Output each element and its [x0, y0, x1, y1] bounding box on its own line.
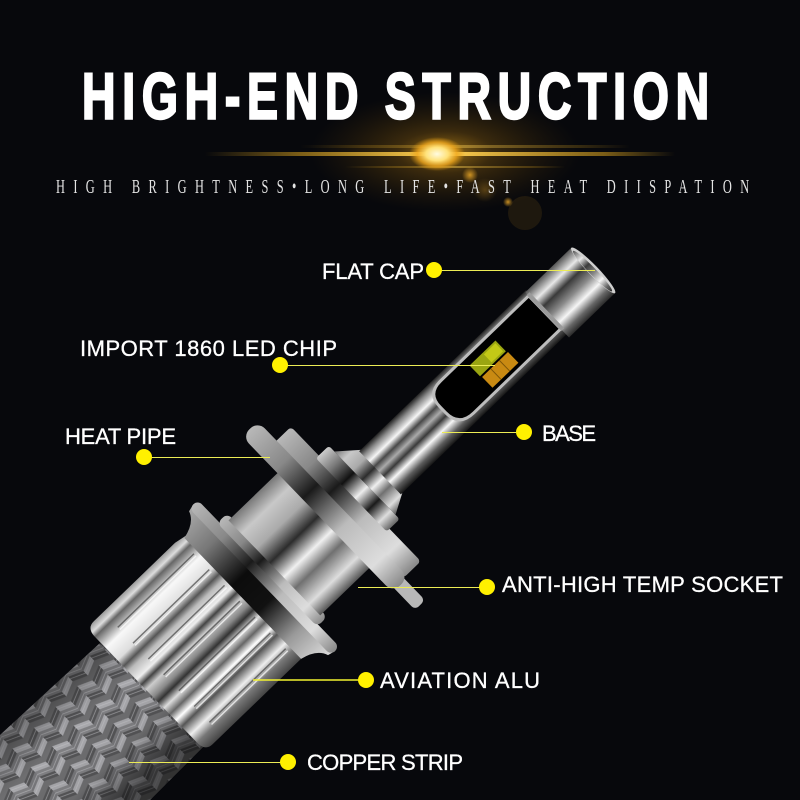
callout: aviation alu	[253, 668, 540, 693]
collar rings	[316, 432, 414, 532]
window top end	[527, 292, 564, 331]
aluminium heat sink body	[87, 532, 305, 751]
callout: flat cap	[322, 259, 595, 284]
callout: base: BASE	[542, 421, 596, 446]
title: HIGH-END STRUCTION	[82, 60, 709, 132]
callout: base	[442, 421, 596, 446]
LED chips	[470, 340, 518, 388]
metal shaft	[359, 290, 568, 494]
callout: LED chip	[80, 336, 495, 373]
callout: socket	[358, 572, 783, 597]
neck and big flange	[172, 492, 348, 672]
callout: LED chip: IMPORT 1860 LED CHIP	[80, 336, 337, 361]
socket cylinder	[229, 470, 372, 615]
LED bulb illustration	[66, 177, 681, 783]
callout: heat pipe: HEAT PIPE	[65, 424, 176, 449]
flat cap	[525, 244, 619, 338]
callout: heat pipe	[65, 424, 270, 465]
callout: copper strip: COPPER STRIP	[307, 750, 463, 775]
heat pipe flange	[242, 407, 423, 593]
callout: aviation alu: AVIATION ALU	[380, 668, 540, 693]
callout: copper strip	[129, 750, 463, 775]
lens flare	[205, 92, 675, 230]
chip window	[427, 296, 561, 427]
callout: flat cap: FLAT CAP	[322, 259, 424, 284]
callout: socket: ANTI-HIGH TEMP SOCKET	[502, 572, 783, 597]
socket tab	[368, 551, 425, 610]
subtitle: HIGH BRIGHTNESS•LONG LIFE•FAST HEAT DIISPATION	[56, 175, 749, 198]
copper braid	[0, 643, 205, 800]
